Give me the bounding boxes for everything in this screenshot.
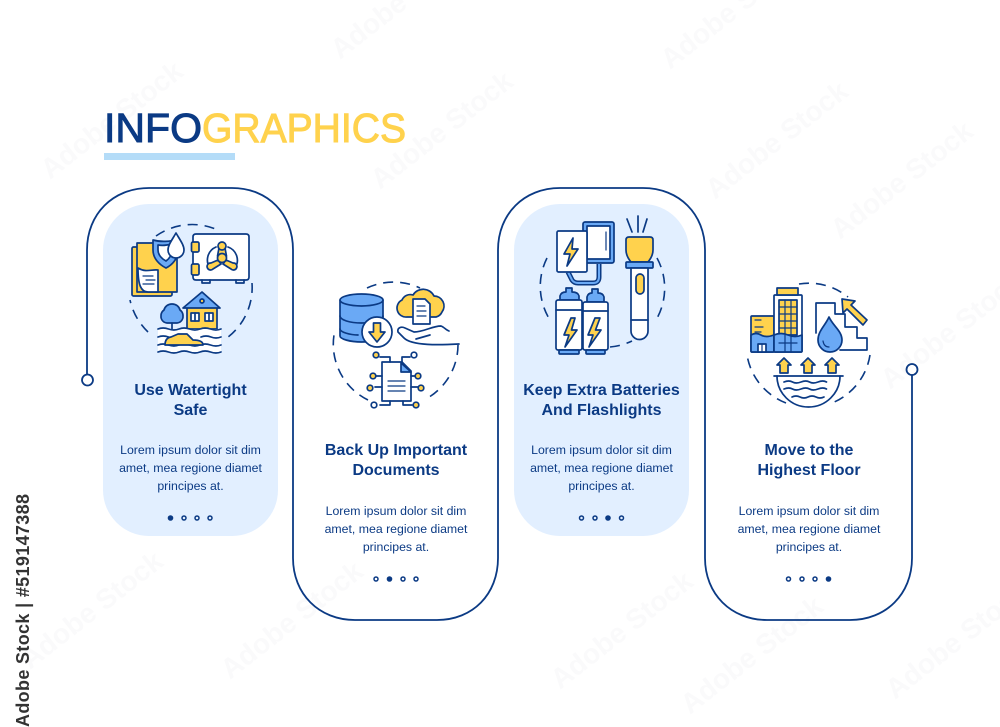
watermark pattern: Adobe Stock: [825, 115, 979, 245]
watermark pattern: Adobe Stock: [545, 565, 699, 695]
heading: Documents: [352, 462, 440, 479]
pagination dots: [580, 515, 624, 521]
body text: Lorem ipsum dolor sit dim: [326, 504, 466, 518]
panel background: card 1: [103, 204, 278, 536]
icon: data backup: [333, 282, 459, 408]
panel: back up important documents: [325, 282, 468, 582]
panel: keep extra batteries and flashlights: [523, 216, 680, 521]
icon: batteries and flashlight: [540, 216, 665, 354]
title: [104, 105, 406, 151]
heading: Highest Floor: [757, 462, 861, 479]
body text: principes at.: [776, 540, 842, 554]
heading: Back Up Important: [325, 442, 468, 459]
body text: amet, mea regione diamet: [738, 522, 881, 536]
watermark pattern: Adobe Stock: [15, 545, 169, 675]
heading: And Flashlights: [542, 402, 662, 419]
pagination dots: [168, 515, 212, 521]
body text: amet, mea regione diamet: [530, 461, 674, 475]
heading: Keep Extra Batteries: [523, 382, 680, 399]
watermark pattern: Adobe Stock: [215, 555, 369, 685]
title underline: [104, 153, 235, 160]
icon: flood safe: [130, 225, 252, 353]
icon: high ground: [747, 283, 870, 407]
body text: principes at.: [363, 540, 429, 554]
pagination dots: [786, 576, 831, 582]
connecting outline across cards: [82, 188, 918, 620]
watermark pattern: Adobe Stock: [35, 55, 189, 185]
watermark pattern: Adobe Stock: [675, 590, 829, 720]
panel: move to the highest floor: [738, 283, 881, 582]
body text: principes at.: [568, 479, 635, 493]
heading: Move to the: [765, 442, 854, 459]
title: INFO: [104, 105, 202, 151]
watermark pattern: Adobe Stock: [700, 75, 854, 205]
heading: Use Watertight: [134, 382, 247, 399]
stock credit: Adobe Stock | #519147388: [13, 494, 33, 727]
body text: Lorem ipsum dolor sit dim: [120, 443, 261, 457]
pagination dots: [374, 576, 418, 582]
heading: Safe: [174, 402, 208, 419]
body text: Lorem ipsum dolor sit dim: [531, 443, 672, 457]
panel: use watertight safe: [119, 225, 263, 521]
body text: principes at.: [157, 479, 224, 493]
body text: amet, mea regione diamet: [325, 522, 468, 536]
panel background: card 3: [514, 204, 689, 536]
body text: amet, mea regione diamet: [119, 461, 263, 475]
title: GRAPHICS: [202, 105, 406, 151]
body text: Lorem ipsum dolor sit dim: [739, 504, 879, 518]
watermark pattern: Adobe Stock: [365, 65, 519, 195]
